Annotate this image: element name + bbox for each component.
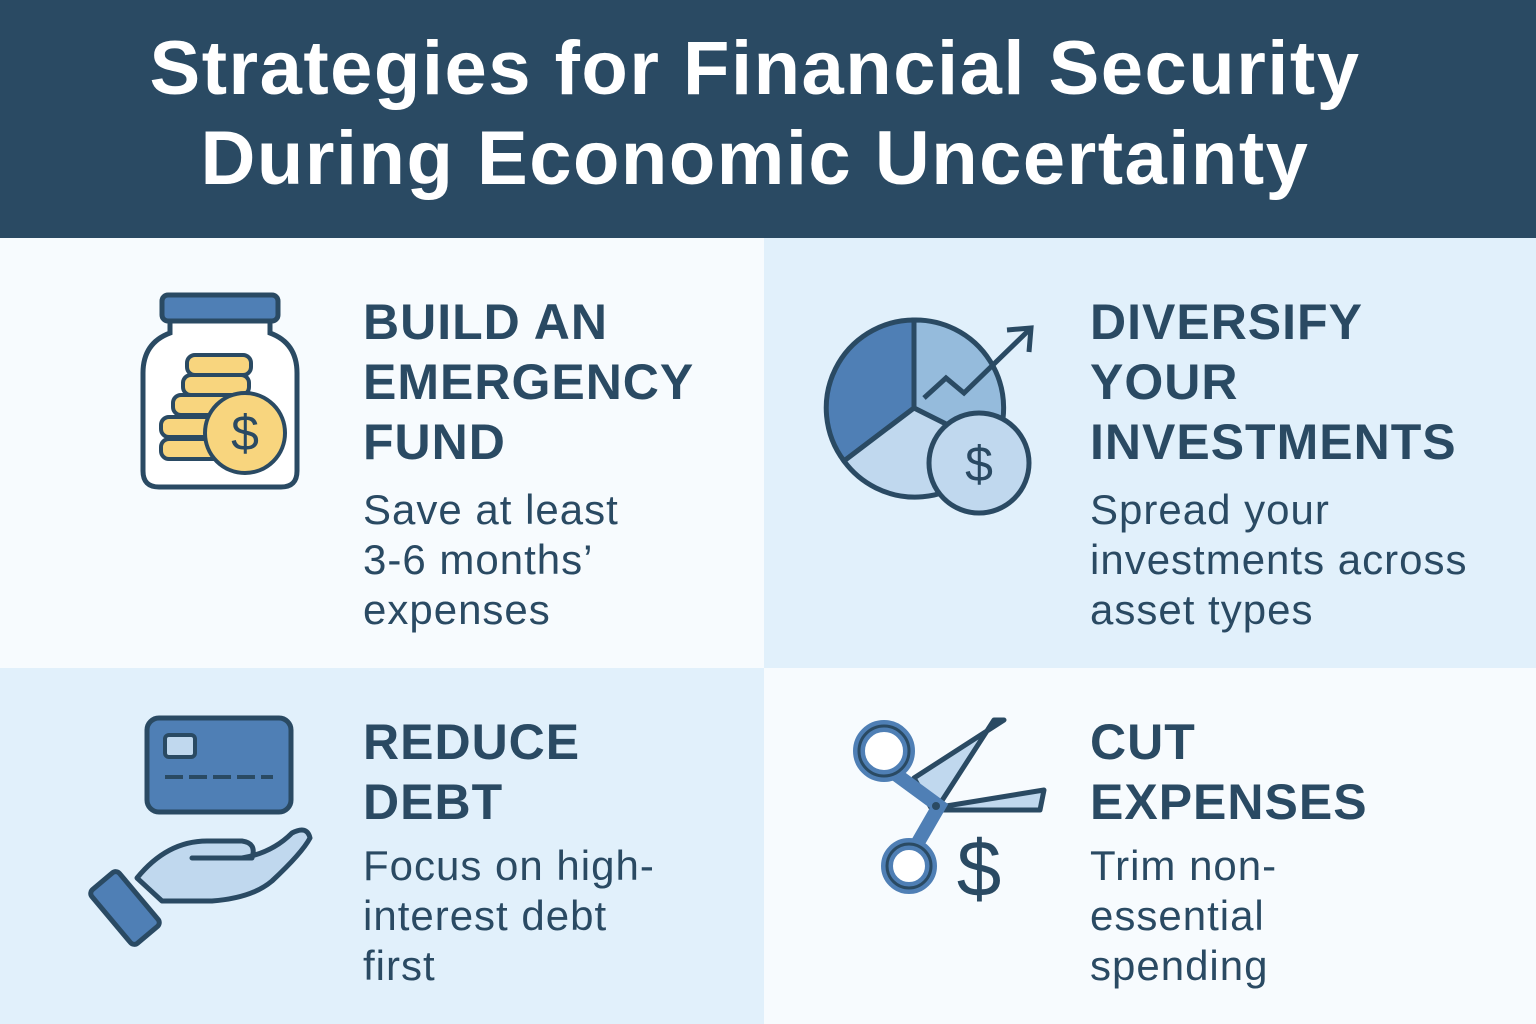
title: Strategies for Financial Security — [150, 26, 1360, 111]
heading: FUND — [363, 414, 506, 470]
icon: jar with coins — [140, 292, 300, 490]
heading: CUT — [1090, 714, 1196, 770]
title — [150, 26, 1360, 201]
panel: cut expenses — [764, 668, 1536, 1024]
heading: BUILD AN — [363, 294, 608, 350]
panel: emergency fund — [0, 238, 764, 668]
body text: spending — [1090, 942, 1268, 989]
header — [0, 0, 1536, 238]
icon: pie chart with arrow and coin — [824, 318, 1034, 516]
icon: scissors with dollar — [853, 718, 1046, 913]
body text — [363, 486, 619, 633]
body text: interest debt — [363, 892, 607, 939]
body text: Focus on high- — [363, 842, 655, 889]
heading — [1090, 714, 1368, 830]
body text: Trim non- — [1090, 842, 1277, 889]
heading: INVESTMENTS — [1090, 414, 1457, 470]
body text: investments across — [1090, 536, 1467, 583]
heading: EXPENSES — [1090, 774, 1368, 830]
heading: REDUCE — [363, 714, 580, 770]
heading — [363, 294, 694, 470]
heading — [363, 714, 580, 830]
body text: expenses — [363, 586, 551, 633]
icon: pie chart with arrow and coin: $ — [965, 436, 993, 492]
body text: 3-6 months’ — [363, 536, 593, 583]
icon: hand with card — [88, 716, 312, 947]
heading: DEBT — [363, 774, 503, 830]
heading: EMERGENCY — [363, 354, 694, 410]
panel: reduce debt — [0, 668, 764, 1024]
body text: first — [363, 942, 436, 989]
icon: jar with coins: $ — [231, 405, 259, 461]
body text — [363, 842, 655, 989]
body text: essential — [1090, 892, 1265, 939]
heading — [1090, 294, 1457, 470]
body text: asset types — [1090, 586, 1313, 633]
body text: Spread your — [1090, 486, 1330, 533]
body text — [1090, 486, 1467, 633]
heading: DIVERSIFY — [1090, 294, 1363, 350]
body text: Save at least — [363, 486, 619, 533]
panel: diversify — [764, 238, 1536, 668]
title: During Economic Uncertainty — [201, 116, 1309, 201]
icon: scissors with dollar: $ — [957, 824, 1001, 913]
heading: YOUR — [1090, 354, 1238, 410]
body text — [1090, 842, 1277, 989]
